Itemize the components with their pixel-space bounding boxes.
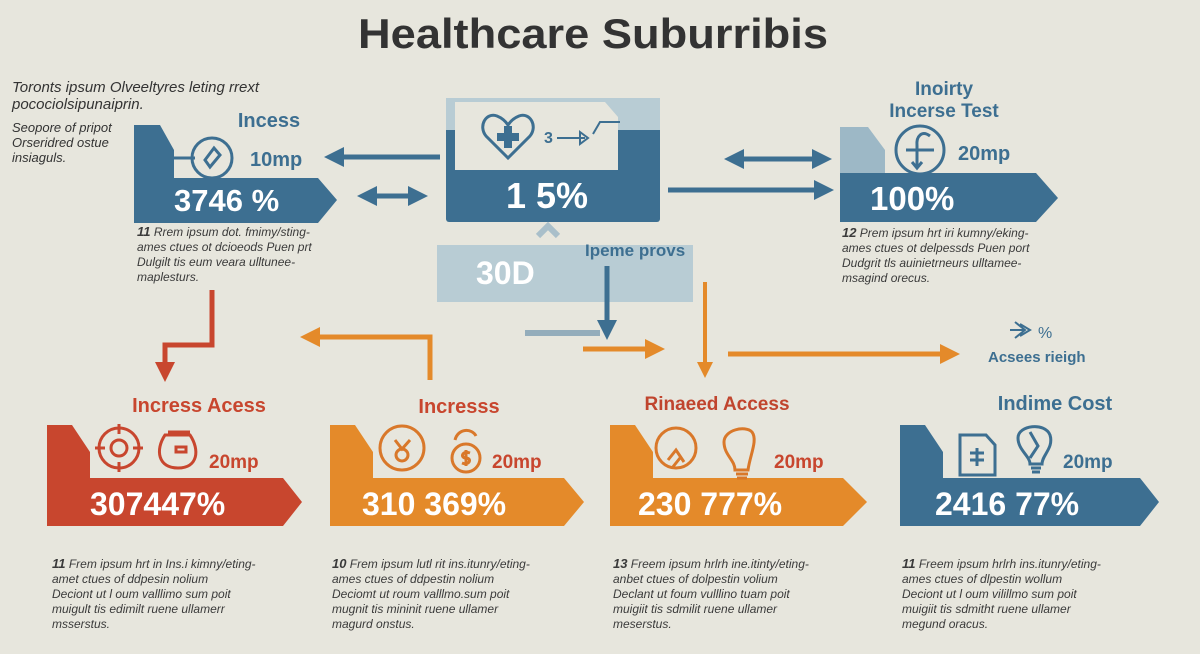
arrow: orange L <box>310 337 430 380</box>
arrow: right <box>668 188 824 192</box>
panel: Incess: Incess <box>238 110 300 132</box>
callout: Acsees rieigh <box>988 322 1086 366</box>
panel: Incresss <box>330 396 584 631</box>
intro text: Seopore of pripot <box>12 120 113 135</box>
panel: Inoirty Incerse Test: 20mp <box>958 143 1010 165</box>
panel: Rinaeed Access: anbet ctues of dolpestin volium <box>613 572 778 586</box>
panel: Incresss: 310 369% <box>362 486 506 522</box>
panel: Incess: 3746 % <box>174 183 279 218</box>
intro text: Orseridred ostue <box>12 135 109 150</box>
panel: Incress Acess: Incress Acess <box>132 395 266 417</box>
panel: Indime Cost: 2416 77% <box>935 486 1079 522</box>
panel: center 15% <box>446 98 660 222</box>
panel: Incress Acess: 20mp <box>209 452 259 473</box>
panel: Incresss: Deciomt ut roum valllmo.sum poit <box>332 587 510 601</box>
panel: Rinaeed Access: 230 777% <box>638 486 782 522</box>
panel: Incess <box>134 110 337 284</box>
panel: Rinaeed Access: Rinaeed Access <box>644 394 790 415</box>
intro text: insiaguls. <box>12 150 66 165</box>
callout: Acsees rieigh: Acsees rieigh <box>988 349 1086 366</box>
panel: Rinaeed Access: 13 Freem ipsum hrlrh ine.itinty/eting- <box>613 556 809 571</box>
arrow: double <box>367 194 418 198</box>
callout: Acsees rieigh: % <box>1038 325 1052 342</box>
panel: Indime Cost <box>900 393 1159 631</box>
panel: Indime Cost: Deciont ut l oum vilillmo sum poit <box>902 587 1077 601</box>
panel: Incress Acess: amet ctues of ddpesin nolium <box>52 572 208 586</box>
panel: Incress Acess: muigult tis edimilt ruene ullamerr <box>52 602 226 616</box>
icon: heart <box>483 115 533 158</box>
arrow: orange down <box>703 282 707 370</box>
panel: 30D: 30D <box>476 255 535 291</box>
panel: Incress Acess: Deciont ut l oum valllimo sum poit <box>52 587 231 601</box>
intro text: Toronts ipsum Olveeltyres leting rrext <box>12 79 260 96</box>
panel: Inoirty Incerse Test: Inoirty <box>915 79 973 100</box>
panel: 30D: Ipeme provs <box>585 241 685 260</box>
panel: Indime Cost: Indime Cost <box>998 393 1113 415</box>
panel: Indime Cost: 11 Freem ipsum hrlrh ins.itunry/eting- <box>902 556 1101 571</box>
panel: Inoirty Incerse Test: ames ctues ot delpessds Puen port <box>842 241 1030 255</box>
panel: Incress Acess: 11 Frem ipsum hrt in Ins.i kimny/eting- <box>52 556 256 571</box>
intro text <box>11 79 260 165</box>
arrow: orange right small <box>583 346 655 352</box>
arrow: left <box>334 154 440 160</box>
panel: Inoirty Incerse Test: Dudgrit tls auinietrneurs ulltamee- <box>842 256 1021 270</box>
arrow: orange long right <box>728 352 950 356</box>
panel: Incress Acess: msserstus. <box>52 617 110 631</box>
panel: Incess: Dulgilt tis eum veara ulltunee- <box>137 255 295 269</box>
panel: Indime Cost: 20mp <box>1063 452 1113 473</box>
panel: Incresss: mugnit tis mininit ruene ullamer <box>332 602 499 616</box>
icon: compass <box>174 138 232 178</box>
arrow: double right <box>734 156 822 162</box>
panel: Rinaeed Access: meserstus. <box>613 617 672 631</box>
icon: f circle <box>896 126 944 174</box>
panel: Incess: 11 Rrem ipsum dot. fmimy/sting- <box>137 224 310 239</box>
panel: Incess: 10mp <box>250 149 302 171</box>
panel: Indime Cost: megund oracus. <box>902 617 988 631</box>
title: Healthcare Suburribis <box>358 10 828 57</box>
panel: Inoirty Incerse Test: msagind orecus. <box>842 271 930 285</box>
panel: Rinaeed Access: 20mp <box>774 452 824 473</box>
panel: Incress Acess <box>47 395 302 631</box>
panel: Incresss: ames ctues of ddpestin nolium <box>332 572 494 586</box>
panel: Inoirty Incerse Test: 12 Prem ipsum hrt iri kumny/eking- <box>842 225 1029 240</box>
arrow: red L <box>165 290 212 372</box>
panel: Incresss: 20mp <box>492 452 542 473</box>
intro text: pocociolsipunaiprin. <box>11 96 144 113</box>
panel: Inoirty Incerse Test: 100% <box>870 180 954 217</box>
panel: Incresss: Incresss <box>418 396 500 418</box>
panel: center 15%: 1 5% <box>506 175 588 216</box>
panel: Incess: maplesturs. <box>137 270 199 284</box>
panel: Incess: ames ctues ot dcioeods Puen prt <box>137 240 312 254</box>
panel: Indime Cost: muigiit tis sdmitht ruene ullamer <box>902 602 1072 616</box>
arrow: down blue <box>604 266 610 330</box>
panel: Indime Cost: ames ctues of dlpestin wollum <box>902 572 1062 586</box>
panel: Rinaeed Access: muigiit tis sdmilit ruene ullamer <box>613 602 778 616</box>
panel: Incresss: magurd onstus. <box>332 617 415 631</box>
panel: Rinaeed Access: Declant ut foum vulllino tuam poit <box>613 587 790 601</box>
panel: center 15%: 3 <box>544 130 553 147</box>
panel: Incress Acess: 307447% <box>90 486 225 522</box>
panel: 30D <box>437 226 693 302</box>
panel: Rinaeed Access <box>610 394 867 631</box>
panel: Inoirty Incerse Test: Incerse Test <box>889 101 999 122</box>
panel: Inoirty Incerse Test <box>840 79 1058 285</box>
panel: Incresss: 10 Frem ipsum lutl rit ins.itunry/eting- <box>332 556 530 571</box>
